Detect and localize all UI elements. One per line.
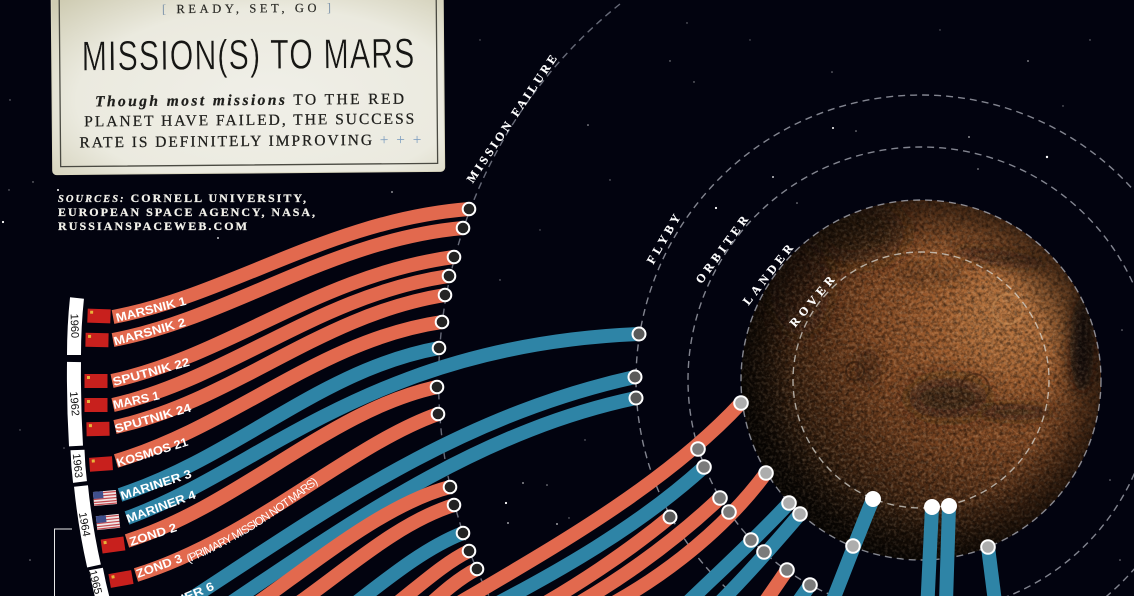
year: 1964: 1964 xyxy=(76,511,92,538)
year: 1963: 1963 xyxy=(70,453,84,478)
year bar 1963 xyxy=(78,450,80,482)
flag: USSR Marsnik 2 xyxy=(85,333,109,347)
sources: SOURCES: CORNELL UNIVERSITY, xyxy=(58,191,306,205)
band: orbiter attempt 3 xyxy=(548,498,720,596)
ring label: mission failure: MISSION FAILURE xyxy=(464,52,560,185)
year timeline xyxy=(67,298,104,596)
year: 1962: 1962 xyxy=(67,391,81,416)
band: Viking 1 xyxy=(680,503,789,596)
band: orbiter 5 xyxy=(796,585,810,596)
endpoint dots xyxy=(431,203,995,592)
year bar 1960 xyxy=(74,298,77,355)
year: 1960: 1960 xyxy=(68,313,80,338)
mission labels xyxy=(111,294,318,596)
card kicker: [ READY, SET, GO ] xyxy=(162,1,335,16)
flags xyxy=(84,309,134,588)
ring label: rover: ROVER xyxy=(787,273,837,330)
bracket line xyxy=(54,529,72,596)
flag: USA Mariner 4 xyxy=(96,514,120,530)
band: Viking 2 xyxy=(712,514,800,596)
label: Zond 3 note: (PRIMARY MISSION NOT MARS) xyxy=(187,478,318,564)
band: Mariner 7 xyxy=(175,398,636,596)
label: Mars 1: MARS 1 xyxy=(112,388,161,412)
dots: mission failure xyxy=(431,203,483,575)
band: Marsnik 1 xyxy=(113,209,469,317)
year bar 1962 xyxy=(74,362,76,446)
label: Zond 3: ZOND 3 xyxy=(134,551,184,581)
band: failure 12 xyxy=(280,505,454,596)
dots: orbiter xyxy=(691,442,817,592)
ring label: lander: LANDER xyxy=(740,241,796,308)
band: Zond 3 xyxy=(136,414,438,575)
band: Kosmos 21 xyxy=(116,322,442,461)
band: Mariner 4 xyxy=(127,334,639,518)
band: rover 2 xyxy=(928,507,932,596)
label: Mariner 3: MARINER 3 xyxy=(119,467,194,503)
mission bands xyxy=(112,209,995,596)
year: 1965: 1965 xyxy=(86,569,104,596)
card subtitle: PLANET HAVE FAILED, THE SUCCESS xyxy=(84,111,414,130)
band: orbiter attempt 4 xyxy=(758,570,787,596)
band: rover 3 xyxy=(946,506,949,596)
dots: rover xyxy=(866,492,956,514)
year bar 1964 xyxy=(81,486,94,566)
card subtitle xyxy=(79,90,422,151)
band: orbiter 1 xyxy=(465,467,704,596)
label: Sputnik 24: SPUTNIK 24 xyxy=(113,401,193,436)
band: Zond 2 xyxy=(127,387,437,541)
band: Sputnik 22 xyxy=(112,257,454,381)
mission failure ring xyxy=(439,4,620,596)
band: lander 3 xyxy=(988,547,995,596)
dots: flyby xyxy=(628,328,676,524)
sources: EUROPEAN SPACE AGENCY, NASA, xyxy=(58,205,315,219)
label: Mariner 4: MARINER 4 xyxy=(124,488,198,526)
band: failure 11 xyxy=(240,487,450,596)
flag: USSR Sputnik 24 xyxy=(86,422,110,436)
card subtitle: RATE IS DEFINITELY IMPROVING + + + xyxy=(79,131,422,151)
sources xyxy=(58,191,315,233)
flag: USSR Zond 2 xyxy=(101,536,125,554)
dots: lander xyxy=(734,396,995,554)
band: Mariner 6 xyxy=(150,377,635,596)
band: Marsnik 2 xyxy=(113,228,463,340)
card title: MISSION(S) TO MARS xyxy=(81,30,415,80)
sources: RUSSIANSPACEWEB.COM xyxy=(58,219,247,233)
flag: USSR Kosmos 21 xyxy=(89,456,113,472)
band: orbiter attempt 2 xyxy=(515,517,670,596)
band: Mariner 3 xyxy=(120,348,439,495)
planet Mars xyxy=(741,200,1101,560)
ring label: orbiter: ORBITER xyxy=(693,213,751,286)
label: Marsnik 1: MARSNIK 1 xyxy=(114,294,188,325)
flag: USSR Marsnik 1 xyxy=(87,309,111,323)
band: lander attempt 2 xyxy=(580,473,766,596)
label: Marsnik 2: MARSNIK 2 xyxy=(112,315,187,348)
card paper xyxy=(51,0,445,175)
band: lander attempt 1 xyxy=(430,403,741,596)
band: failure 14 xyxy=(375,551,469,596)
flag: USSR Mars 1 xyxy=(84,398,108,412)
card subtitle: Though most missions TO THE RED xyxy=(95,91,404,110)
band: failure 13 xyxy=(340,533,463,596)
band: Mars 1 xyxy=(113,276,449,405)
orbit rings: rover, lander, orbiter, flyby xyxy=(636,95,1134,596)
year bar 1965 xyxy=(96,569,103,596)
band: failure 15 xyxy=(410,569,477,596)
title card xyxy=(51,0,445,175)
flag: USSR Sputnik 22 xyxy=(84,374,108,388)
card inner border xyxy=(59,0,438,167)
band: Sputnik 24 xyxy=(115,295,445,427)
label: Sputnik 22: SPUTNIK 22 xyxy=(111,355,191,389)
flag: USA Mariner 3 xyxy=(93,490,117,506)
ring label: flyby: FLYBY xyxy=(644,211,684,266)
band: rover 1 xyxy=(829,499,873,596)
label: Kosmos 21: KOSMOS 21 xyxy=(115,435,190,470)
label: Zond 2: ZOND 2 xyxy=(128,520,179,549)
flag: USSR Zond 3 xyxy=(108,570,134,588)
